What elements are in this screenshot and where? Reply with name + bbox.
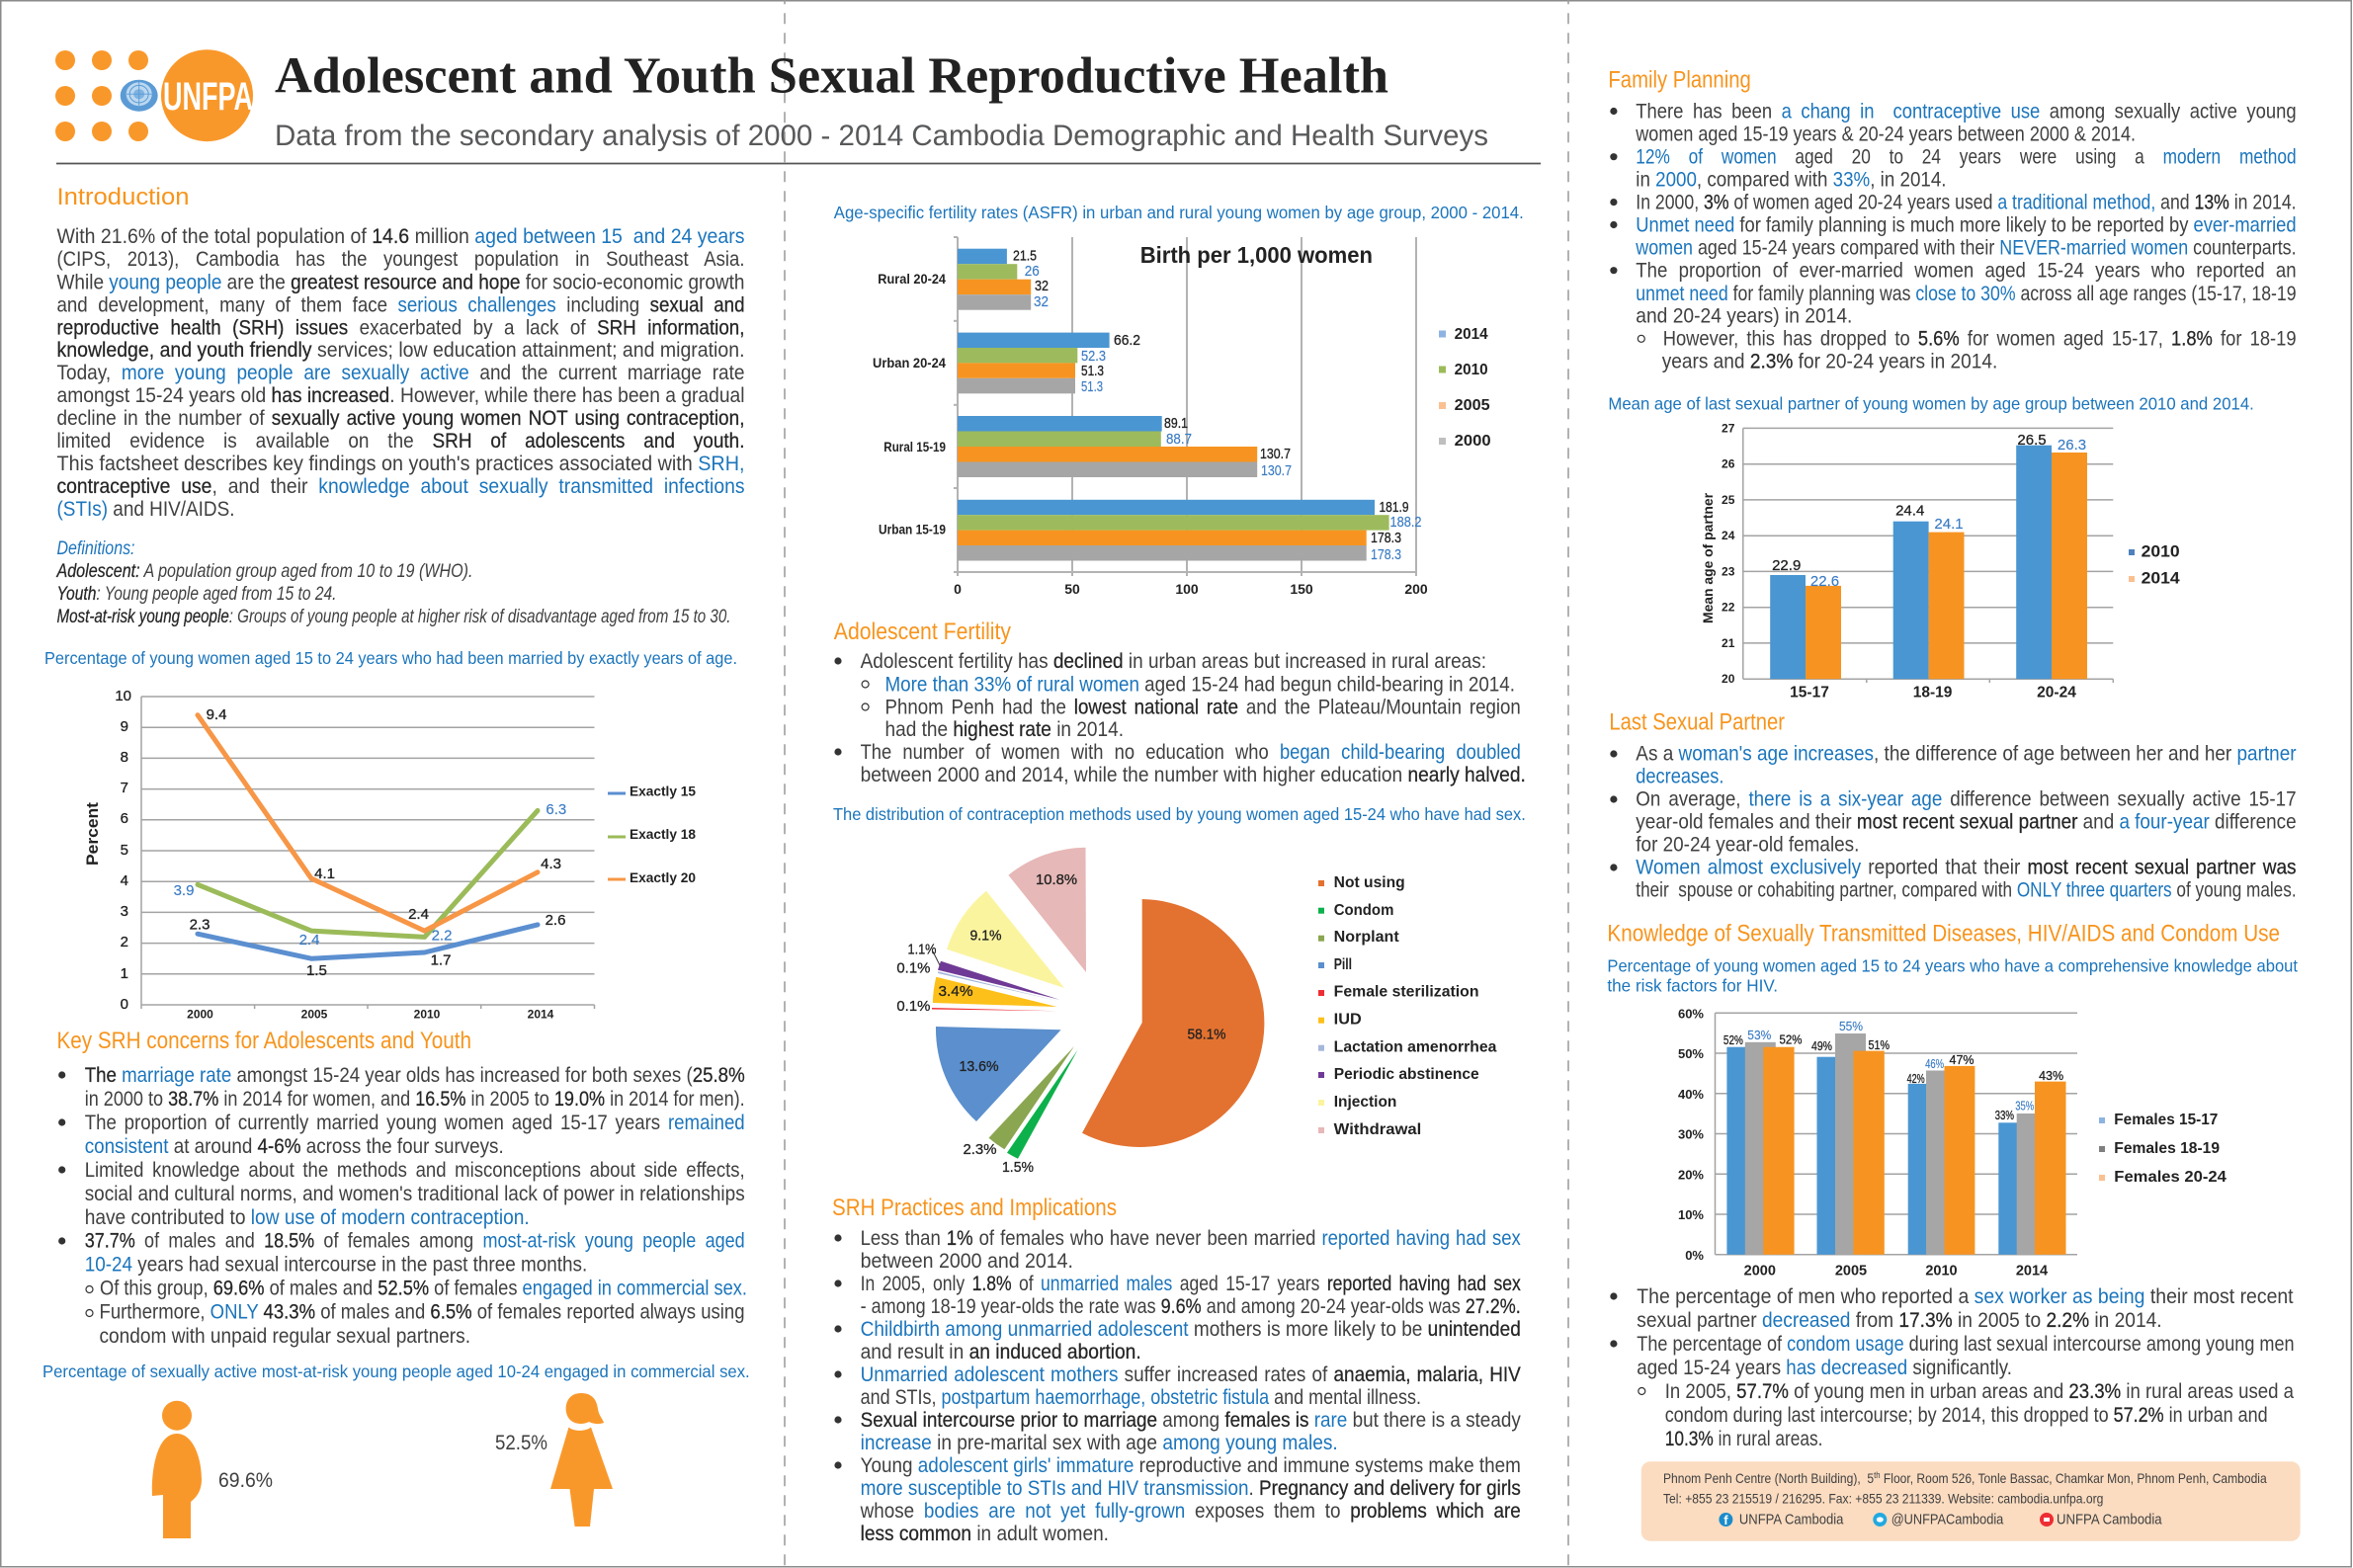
y axis labels: 27 bbox=[1722, 421, 1735, 435]
bullet list: key concerns: social and cultural norms, and women's traditional lack of power in relationships bbox=[85, 1183, 745, 1205]
x axis labels: 18-19 bbox=[1913, 685, 1953, 701]
bullet list: SRH practices: increase in pre-marital sex with age among young males. bbox=[861, 1432, 1338, 1454]
data labels: 35% bbox=[2015, 1098, 2035, 1113]
data labels: 2.2 bbox=[432, 928, 452, 945]
bars: rural 20-24 bbox=[958, 249, 1031, 310]
data labels: 21.5 bbox=[1013, 247, 1037, 265]
bullet list: adolescent fertility: The number of women with no education who began child-bearing doubled bbox=[861, 741, 1521, 764]
data labels: 22.6 bbox=[1810, 573, 1839, 590]
pie legend: Lactation amenorrhea bbox=[1334, 1039, 1497, 1056]
y axis labels bbox=[115, 688, 131, 1013]
pie legend: Pill bbox=[1334, 956, 1352, 973]
bullet list: key concerns: The marriage rate amongst 15-24 year olds has increased for both sexes (25.8% bbox=[85, 1064, 745, 1087]
bullet list: key concerns: 37.7% of males and 18.5% of females among most-at-risk young people aged bbox=[85, 1230, 745, 1253]
bullet list: adolescent fertility bbox=[834, 650, 1526, 786]
x axis labels: 50 bbox=[1064, 581, 1080, 597]
bullet list: SRH practices: In 2005, only 1.8% of unmarried males aged 15-17 years reported having had sex bbox=[861, 1273, 1521, 1295]
data labels: 46% bbox=[1925, 1056, 1944, 1071]
data labels: 89.1 bbox=[1164, 415, 1188, 432]
pie legend: Norplant bbox=[1334, 929, 1399, 946]
data labels: 130.7 bbox=[1261, 462, 1292, 479]
y axis labels: 20 bbox=[1722, 672, 1735, 686]
bullet list: key concerns: Of this group, 69.6% of males and 52.5% of females engaged in commercial sex. bbox=[100, 1278, 747, 1300]
bullet list: adolescent fertility: Phnom Penh had the lowest national rate and the Plateau/Mountain region bbox=[885, 696, 1521, 718]
bullet list: family planning: In 2000, 3% of women aged 20-24 years used a traditional method, and 13% in 2014. bbox=[1636, 192, 2297, 214]
text block: introduction paragraph: This factsheet describes key findings on youth's practices associated with SRH, bbox=[57, 453, 745, 475]
pie data labels: 10.8% bbox=[1036, 871, 1077, 888]
pie data labels: 9.1% bbox=[970, 928, 1002, 945]
bullet list: key concerns: consistent at around 4-6% across the four surveys. bbox=[85, 1135, 504, 1158]
y axis labels: 10 bbox=[115, 688, 131, 704]
line series: exactly 18 bbox=[198, 810, 538, 937]
bar chart: mean age of last sexual partner bbox=[1700, 421, 2180, 701]
text block: introduction paragraph: Today, more young people are sexually active and the current marriage rate bbox=[57, 362, 745, 384]
y axis labels: 8 bbox=[121, 749, 128, 766]
slice: female sterilization bbox=[932, 1008, 1057, 1011]
bullet list: last sexual partner: decreases. bbox=[1636, 766, 1723, 788]
y axis labels bbox=[1722, 421, 1735, 686]
slice: withdrawal bbox=[1008, 848, 1086, 972]
text block: definitions: Adolescent: A population group aged from 10 to 19 (WHO). bbox=[56, 561, 472, 582]
data labels: 22.9 bbox=[1772, 557, 1801, 574]
data labels: 6.3 bbox=[546, 801, 566, 818]
y axis labels: 9 bbox=[121, 718, 128, 735]
chart caption: commercial sex: Percentage of sexually active most-at-risk young people aged 10-24 engaged in commercial sex. bbox=[42, 1362, 750, 1381]
line series: exactly 15 bbox=[198, 925, 538, 958]
x axis labels: 2000 bbox=[1744, 1263, 1776, 1279]
bullet list: key concerns: The proportion of currently married young women aged 15-17 years remained bbox=[85, 1112, 745, 1134]
pie data labels: 1.5% bbox=[1002, 1159, 1034, 1176]
data labels: 66.2 bbox=[1114, 332, 1140, 349]
data labels bbox=[1723, 1019, 2064, 1122]
x axis labels: 2010 bbox=[414, 1008, 441, 1022]
chart caption: comprehensive knowledge bbox=[1607, 956, 2298, 996]
data labels: 1.7 bbox=[431, 952, 451, 969]
data labels: 3.9 bbox=[174, 882, 194, 899]
legend: 2010 bbox=[2142, 541, 2180, 561]
text block: sex worker and condom findings: sexual partner decreased from 17.3% in 2005 to 2.2% in 2014. bbox=[1637, 1309, 2162, 1332]
bar chart: comprehensive HIV knowledge bbox=[1678, 1006, 2227, 1279]
icon: female figure 52.5%: 52.5% bbox=[495, 1432, 547, 1454]
chart caption: married by exact age: Percentage of young women aged 15 to 24 years who had been married by exactly years of age. bbox=[44, 648, 737, 668]
data labels: 47% bbox=[1949, 1052, 1975, 1067]
y axis labels: 4 bbox=[121, 872, 128, 889]
data labels: 2.4 bbox=[408, 906, 429, 923]
legend bbox=[1439, 326, 1491, 450]
y axis labels: 20% bbox=[1678, 1167, 1704, 1182]
pie data labels: 0.1% bbox=[896, 998, 930, 1015]
pie legend: Withdrawal bbox=[1334, 1121, 1421, 1138]
data labels: 26 bbox=[1025, 263, 1040, 280]
data labels: 43% bbox=[2039, 1068, 2064, 1083]
pie data labels: 13.6% bbox=[959, 1058, 998, 1075]
pie legend: Condom bbox=[1334, 902, 1393, 919]
pie data labels: 58.1% bbox=[1188, 1027, 1225, 1043]
legend: 2000 bbox=[1455, 433, 1491, 450]
data labels: 49% bbox=[1811, 1038, 1832, 1053]
bullet list: last sexual partner bbox=[1610, 743, 2297, 901]
legend bbox=[2129, 541, 2180, 587]
y axis labels: 30% bbox=[1678, 1126, 1704, 1142]
heading: adolescent fertility: Adolescent Fertility bbox=[834, 619, 1011, 645]
y axis labels: 23 bbox=[1722, 564, 1735, 578]
text block: sex worker and condom findings bbox=[1610, 1285, 2295, 1450]
text block: definitions: Definitions: bbox=[57, 538, 134, 559]
y axis title: Percent bbox=[83, 802, 102, 866]
bullet list: SRH practices: Childbirth among unmarried adolescent mothers is more likely to be unintended bbox=[861, 1318, 1521, 1341]
subtitle: Data from the secondary analysis of 2000 - 2014 Cambodia Demographic and Health Surveys bbox=[275, 120, 1488, 152]
bullet list: last sexual partner: year-old females and their most recent sexual partner and a four-year difference bbox=[1636, 810, 2297, 834]
pie data labels bbox=[896, 871, 1225, 1176]
contact phone and website: Tel: +855 23 215519 / 216295. Fax: +855 23 211339. Website: cambodia.unfpa.org bbox=[1663, 1491, 2103, 1507]
y axis title: Mean age of partner bbox=[1700, 492, 1716, 623]
text block: introduction paragraph: and development, many of them face serious challenges including sexual and bbox=[57, 294, 745, 316]
bullet list: family planning: women aged 15-19 years & 20-24 years between 2000 & 2014. bbox=[1635, 124, 2136, 146]
heading: SRH practices: SRH Practices and Implications bbox=[832, 1195, 1117, 1221]
text block: sex worker and condom findings: In 2005, 57.7% of young men in urban areas and 23.3% in rural areas used a bbox=[1665, 1380, 2294, 1403]
x axis labels bbox=[187, 1008, 554, 1022]
y axis labels: 2 bbox=[121, 934, 128, 950]
data labels: 33% bbox=[1995, 1108, 2014, 1122]
data labels: 188.2 bbox=[1389, 514, 1421, 531]
bars: 2014 bbox=[1998, 1082, 2065, 1255]
data labels: 52% bbox=[1723, 1032, 1743, 1047]
y axis labels: 25 bbox=[1722, 493, 1735, 507]
y axis labels bbox=[1678, 1006, 1704, 1263]
slice: condom bbox=[1007, 1050, 1077, 1159]
chart caption: contraception distribution: The distribution of contraception methods used by young women aged 15-24 who have had sex. bbox=[833, 804, 1526, 824]
legend: Females 15-17 bbox=[2114, 1112, 2218, 1128]
bullet list: SRH practices: between 2000 and 2014. bbox=[861, 1250, 1073, 1273]
data labels: 2.6 bbox=[546, 912, 565, 929]
bullet list: last sexual partner: As a woman's age increases, the difference of age between her and her partner bbox=[1636, 743, 2297, 766]
data labels: 88.7 bbox=[1166, 431, 1192, 448]
x axis labels: 0 bbox=[954, 581, 962, 597]
chart caption: mean age of partner: Mean age of last sexual partner of young women by age group between 2010 and 2014. bbox=[1608, 393, 2254, 413]
pie data labels: 0.1% bbox=[896, 960, 930, 977]
bullet list: family planning: Unmet need for family planning is much more likely to be reported by ever-married bbox=[1636, 213, 2297, 236]
bullet list: last sexual partner: for 20-24 year-old females. bbox=[1636, 834, 1859, 856]
y axis labels: 0% bbox=[1685, 1248, 1704, 1263]
data labels: 51.3 bbox=[1081, 363, 1104, 379]
x axis labels: 2014 bbox=[528, 1008, 554, 1022]
data labels: 24.4 bbox=[1895, 502, 1924, 519]
pie data labels: 2.3% bbox=[963, 1141, 996, 1158]
y axis labels: 60% bbox=[1678, 1006, 1704, 1021]
pie data labels: 3.4% bbox=[939, 983, 972, 1000]
panel: key SRH concerns bbox=[57, 1028, 747, 1348]
icon: facebook: f bbox=[1723, 1513, 1728, 1527]
text block: introduction paragraph: knowledge, and youth friendly services; low education attainment; and migration. bbox=[57, 339, 745, 362]
bars: urban 20-24 bbox=[958, 333, 1110, 393]
bullet list: key concerns: Limited knowledge about the methods and misconceptions about side effects, bbox=[85, 1159, 745, 1182]
pie legend bbox=[1318, 874, 1497, 1138]
pie legend: Female sterilization bbox=[1334, 984, 1478, 1001]
text block: introduction paragraph: (CIPS, 2013), Cambodia has the youngest population in Southeast Asia. bbox=[57, 248, 745, 271]
text block: sex worker and condom findings: 10.3% in rural areas. bbox=[1665, 1428, 1822, 1450]
x axis labels bbox=[1790, 685, 2076, 701]
data labels: 42% bbox=[1907, 1071, 1925, 1086]
x axis labels: 2005 bbox=[301, 1008, 328, 1022]
panel: family planning bbox=[1608, 67, 2297, 372]
text block: sex worker and condom findings: The percentage of condom usage during last sexual intercourse among young men bbox=[1637, 1333, 2295, 1356]
pie data labels: 1.1% bbox=[907, 942, 937, 958]
text block: introduction paragraph: contraceptive use, and their knowledge about sexually transmitted infections bbox=[57, 475, 745, 498]
bullet list: family planning: years and 2.3% for 20-24 years in 2014. bbox=[1662, 350, 1997, 372]
heading: key SRH concerns: Key SRH concerns for Adolescents and Youth bbox=[57, 1028, 471, 1054]
bullet list: family planning: unmet need for family planning was close to 30% across all age ranges (15-17, 18-19 bbox=[1636, 283, 2297, 305]
data labels: 53% bbox=[1747, 1028, 1772, 1042]
text block: sex worker and condom findings: The percentage of men who reported a sex worker as being their most recent bbox=[1637, 1285, 2294, 1308]
y axis labels: 50% bbox=[1678, 1046, 1704, 1061]
bullet list: family planning: women aged 15-24 years compared with their NEVER-married women counterparts. bbox=[1635, 237, 2297, 259]
text block: introduction paragraph: While young people are the greatest resource and hope for socio-economic growth bbox=[57, 271, 745, 293]
bullet list: last sexual partner: Women almost exclusively reported that their most recent sexual partner was bbox=[1636, 856, 2297, 879]
x axis labels bbox=[954, 581, 1428, 597]
bullet list: key concerns: have contributed to low use of modern contraception. bbox=[85, 1206, 530, 1229]
x axis labels: 2010 bbox=[1925, 1263, 1958, 1279]
bullet list: SRH practices: Unmarried adolescent mothers suffer increased rates of anaemia, malaria, HIV bbox=[861, 1363, 1521, 1386]
icon: youtube: UNFPA Cambodia bbox=[2057, 1512, 2162, 1528]
bars: rural 15-19 bbox=[958, 416, 1257, 477]
icon: male figure 69.6%: 69.6% bbox=[218, 1469, 273, 1492]
bullet list: SRH practices: and STIs, postpartum haemorrhage, obstetric fistula and mental illness. bbox=[861, 1386, 1421, 1409]
bullet list: family planning: However, this has dropped to 5.6% for women aged 15-17, 1.8% for 18-19 bbox=[1663, 328, 2297, 351]
pie chart: contraception methods bbox=[896, 848, 1497, 1176]
bars: 2010 bbox=[1908, 1066, 1975, 1255]
bullet list: SRH practices: Less than 1% of females who have never been married reported having had sex bbox=[861, 1227, 1521, 1250]
bullet list: adolescent fertility: More than 33% of rural women aged 15-24 had begun child-bearing in 2014. bbox=[885, 674, 1515, 696]
legend bbox=[608, 784, 696, 885]
legend: 2014 bbox=[1455, 326, 1488, 343]
bullet list: key concerns: condom with unpaid regular sexual partners. bbox=[99, 1325, 470, 1348]
text block: definitions bbox=[56, 538, 731, 627]
data labels: 1.5 bbox=[306, 962, 327, 979]
bullet list: family planning bbox=[1610, 100, 2297, 372]
data labels: 52% bbox=[1779, 1032, 1803, 1047]
bullet list: SRH practices: whose bodies are not yet fully-grown exposes them to problems which are bbox=[860, 1500, 1521, 1523]
data labels: 32 bbox=[1035, 278, 1049, 294]
bullet list: SRH practices: - among 18-19 year-olds the rate was 9.6% and among 20-24 year-olds was 27.2%. bbox=[861, 1295, 1521, 1318]
bars: 2000 bbox=[1726, 1042, 1795, 1255]
data labels: 181.9 bbox=[1380, 499, 1409, 516]
data labels bbox=[1013, 247, 1421, 563]
y axis labels: 6 bbox=[121, 810, 128, 827]
bullet list: key concerns: 10-24 years had sexual intercourse in the past three months. bbox=[85, 1254, 587, 1277]
text block: introduction paragraph bbox=[57, 225, 745, 521]
bars: 15-17 bbox=[1770, 575, 1841, 679]
x axis labels bbox=[1744, 1263, 2048, 1279]
data labels: 32 bbox=[1034, 293, 1049, 310]
bullet list: last sexual partner: On average, there is a six-year age difference between sexually active 15-17 bbox=[1636, 788, 2297, 811]
x axis labels: 15-17 bbox=[1790, 685, 1829, 701]
x axis labels: 200 bbox=[1404, 581, 1428, 597]
data labels: 178.3 bbox=[1371, 546, 1401, 563]
logo: UNFPA bbox=[55, 49, 253, 141]
chart caption: comprehensive knowledge: the risk factors for HIV. bbox=[1607, 976, 1778, 996]
y axis labels: 40% bbox=[1678, 1087, 1704, 1102]
data labels: 178.3 bbox=[1371, 530, 1401, 546]
contact address: Floor, Room 526, Tonle Bassac, Chamkar Mon, Phnom Penh, Cambodia bbox=[1881, 1470, 2267, 1486]
category labels bbox=[873, 271, 946, 537]
panel: introduction bbox=[56, 184, 745, 627]
bullet list: SRH practices: more susceptible to STIs and HIV transmission. Pregnancy and delivery for girls bbox=[861, 1477, 1521, 1500]
text block: introduction paragraph: (STIs) and HIV/AIDS. bbox=[57, 498, 235, 521]
legend: Exactly 15 bbox=[630, 784, 696, 799]
icon: male figure 69.6% bbox=[152, 1401, 273, 1538]
text block: introduction paragraph: reproductive health (SRH) issues exacerbated by a lack of SRH information, bbox=[57, 316, 745, 339]
chart label: birth per 1,000 women: Birth per 1,000 women bbox=[1140, 242, 1373, 268]
x axis labels: 20-24 bbox=[2037, 685, 2076, 701]
data labels: 4.1 bbox=[314, 866, 335, 882]
icon: twitter: @UNFPACambodia bbox=[1891, 1512, 2004, 1528]
panel: adolescent fertility bbox=[834, 619, 1526, 786]
bullet list: family planning: in 2000, compared with 33%, in 2014. bbox=[1636, 168, 1947, 192]
category labels: Rural 20-24 bbox=[878, 271, 946, 287]
bars: 2005 bbox=[1816, 1033, 1885, 1255]
y axis labels: 5 bbox=[121, 842, 128, 859]
bullet list: key concerns: in 2000 to 38.7% in 2014 for women, and 16.5% in 2005 to 19.0% in 2014 for men). bbox=[85, 1088, 745, 1111]
slice: IUD bbox=[933, 977, 1057, 1007]
bullet list: key concerns bbox=[58, 1064, 747, 1348]
category labels: Rural 15-19 bbox=[883, 439, 946, 454]
bullet list: SRH practices: Sexual intercourse prior to marriage among females is rare but there is a steady bbox=[861, 1409, 1521, 1432]
bullet list: adolescent fertility: between 2000 and 2014, while the number with higher education nearly halved. bbox=[861, 764, 1526, 786]
data labels: 26.5 bbox=[2017, 432, 2047, 449]
data labels bbox=[1772, 432, 2086, 590]
legend: Females 20-24 bbox=[2114, 1169, 2227, 1186]
footer: contact box bbox=[1641, 1461, 2301, 1541]
pie legend: Periodic abstinence bbox=[1334, 1066, 1479, 1083]
bars: 20-24 bbox=[2016, 446, 2087, 679]
data labels: 2.3 bbox=[190, 917, 210, 934]
text block: introduction paragraph: amongst 15-24 years old has increased. However, while there has been a gradual bbox=[57, 384, 745, 407]
heading: family planning: Family Planning bbox=[1608, 67, 1751, 94]
logo: UNFPA: UNFPA bbox=[163, 75, 253, 119]
bullet list: SRH practices: and result in an induced abortion. bbox=[861, 1341, 1141, 1363]
pie legend: IUD bbox=[1334, 1012, 1362, 1029]
bars: urban 15-19 bbox=[958, 500, 1389, 561]
contact address: Phnom Penh Centre (North Building), 5 bbox=[1663, 1470, 1907, 1486]
bullet list: key concerns: Furthermore, ONLY 43.3% of males and 6.5% of females reported always using bbox=[99, 1301, 745, 1324]
legend: Females 18-19 bbox=[2114, 1140, 2220, 1157]
contact address: th bbox=[1874, 1470, 1881, 1480]
category labels: Urban 15-19 bbox=[879, 522, 946, 537]
y axis labels: 1 bbox=[121, 965, 128, 982]
text block: introduction paragraph: limited evidence is available on the SRH of adolescents and youth. bbox=[57, 430, 745, 453]
slice: not using bbox=[1082, 899, 1264, 1147]
pie legend: Not using bbox=[1334, 874, 1405, 891]
text block: definitions: Most-at-risk young people: Groups of young people at higher risk of disadvantage aged from 15 to 30. bbox=[57, 607, 731, 627]
data labels: 51.3 bbox=[1081, 378, 1103, 395]
line series: exactly 20 bbox=[198, 715, 538, 931]
slice: injection bbox=[947, 891, 1064, 988]
y axis labels: 21 bbox=[1722, 636, 1735, 650]
bullet list: last sexual partner: their spouse or cohabiting partner, compared with ONLY three quarters of young males. bbox=[1636, 878, 2297, 901]
legend: Exactly 18 bbox=[630, 826, 696, 842]
data labels: 51% bbox=[1869, 1037, 1890, 1052]
legend: 2010 bbox=[1455, 362, 1488, 378]
y axis labels: 7 bbox=[121, 780, 128, 796]
bullet list: family planning: and 20-24 years) in 2014. bbox=[1636, 304, 1852, 328]
legend: 2005 bbox=[1455, 397, 1490, 414]
y axis labels: 24 bbox=[1722, 529, 1735, 542]
data labels: 2.4 bbox=[299, 932, 319, 949]
legend: 2014 bbox=[2142, 568, 2180, 587]
line chart: percent married by exact age bbox=[83, 688, 696, 1022]
panel: SRH practices and implications bbox=[832, 1195, 1521, 1545]
legend: Exactly 20 bbox=[630, 869, 696, 885]
x axis labels: 2000 bbox=[187, 1008, 213, 1022]
text block: definitions: Youth: Young people aged from 15 to 24. bbox=[57, 584, 336, 605]
y axis labels: 22 bbox=[1722, 601, 1735, 615]
bullet list: SRH practices: Young adolescent girls' immature reproductive and immune systems make them bbox=[861, 1454, 1521, 1477]
data labels: 24.1 bbox=[1934, 516, 1964, 533]
bars: 18-19 bbox=[1893, 522, 1965, 679]
pie legend: Injection bbox=[1334, 1094, 1396, 1111]
x axis labels: 150 bbox=[1290, 581, 1313, 597]
x axis labels: 100 bbox=[1175, 581, 1199, 597]
bullet list: adolescent fertility: had the highest rate in 2014. bbox=[885, 718, 1124, 741]
y axis labels: 10% bbox=[1678, 1207, 1704, 1222]
data labels: 130.7 bbox=[1260, 446, 1291, 462]
text block: sex worker and condom findings: aged 15-24 years has decreased significantly. bbox=[1637, 1357, 2012, 1379]
data labels: 26.3 bbox=[2058, 437, 2086, 454]
text block: introduction paragraph: With 21.6% of the total population of 14.6 million aged between 15 and 24 years bbox=[57, 225, 745, 248]
heading: last sexual partner: Last Sexual Partner bbox=[1609, 708, 1785, 735]
data labels: 9.4 bbox=[207, 706, 226, 723]
data labels: 52.3 bbox=[1081, 348, 1106, 365]
bullet list: adolescent fertility: Adolescent fertility has declined in urban areas but increased in rural areas: bbox=[861, 650, 1486, 673]
chart caption: comprehensive knowledge: Percentage of young women aged 15 to 24 years who have a comprehensive knowledge about bbox=[1607, 956, 2298, 976]
x axis labels: 2005 bbox=[1835, 1263, 1867, 1279]
data labels: 55% bbox=[1839, 1019, 1863, 1033]
slice: norplant bbox=[988, 1046, 1074, 1149]
data labels bbox=[174, 706, 566, 979]
legend bbox=[2099, 1112, 2227, 1186]
data labels: 4.3 bbox=[541, 856, 561, 872]
bullet list: SRH practices: less common in adult women. bbox=[861, 1523, 1109, 1545]
bullet list: family planning: 12% of women aged 20 to 24 years were using a modern method bbox=[1636, 146, 2297, 169]
bullet list: family planning: There has been a chang in contraceptive use among sexually active young bbox=[1636, 100, 2297, 123]
title: Adolescent and Youth Sexual Reproductive Health bbox=[275, 47, 1388, 105]
chart caption: ASFR: Age-specific fertility rates (ASFR) in urban and rural young women by age group, 2000 - 2014. bbox=[834, 203, 1524, 222]
heading: introduction: Introduction bbox=[57, 184, 190, 210]
y axis labels: 3 bbox=[121, 903, 128, 920]
slice: periodic abstinence bbox=[938, 961, 1059, 1000]
panel: last sexual partner bbox=[1609, 708, 2297, 901]
slice: lactation amenorrhea bbox=[938, 971, 1058, 1001]
icon: female figure 52.5% bbox=[495, 1393, 613, 1527]
text block: introduction paragraph: decline in the number of sexually active young women NOT using contraception, bbox=[57, 407, 745, 430]
bullet list: SRH practices bbox=[834, 1227, 1521, 1545]
text block: sex worker and condom findings: condom during last intercourse; by 2014, this dropped to 57.2% in urban and bbox=[1665, 1404, 2268, 1427]
bar chart: age-specific fertility rates bbox=[873, 237, 1491, 597]
category labels: Urban 20-24 bbox=[873, 355, 946, 371]
y axis labels: 0 bbox=[121, 996, 128, 1013]
y axis labels: 26 bbox=[1722, 457, 1735, 471]
x axis labels: 2014 bbox=[2016, 1263, 2048, 1279]
slice: pill bbox=[936, 1027, 1061, 1121]
icon: facebook: UNFPA Cambodia bbox=[1739, 1512, 1844, 1528]
